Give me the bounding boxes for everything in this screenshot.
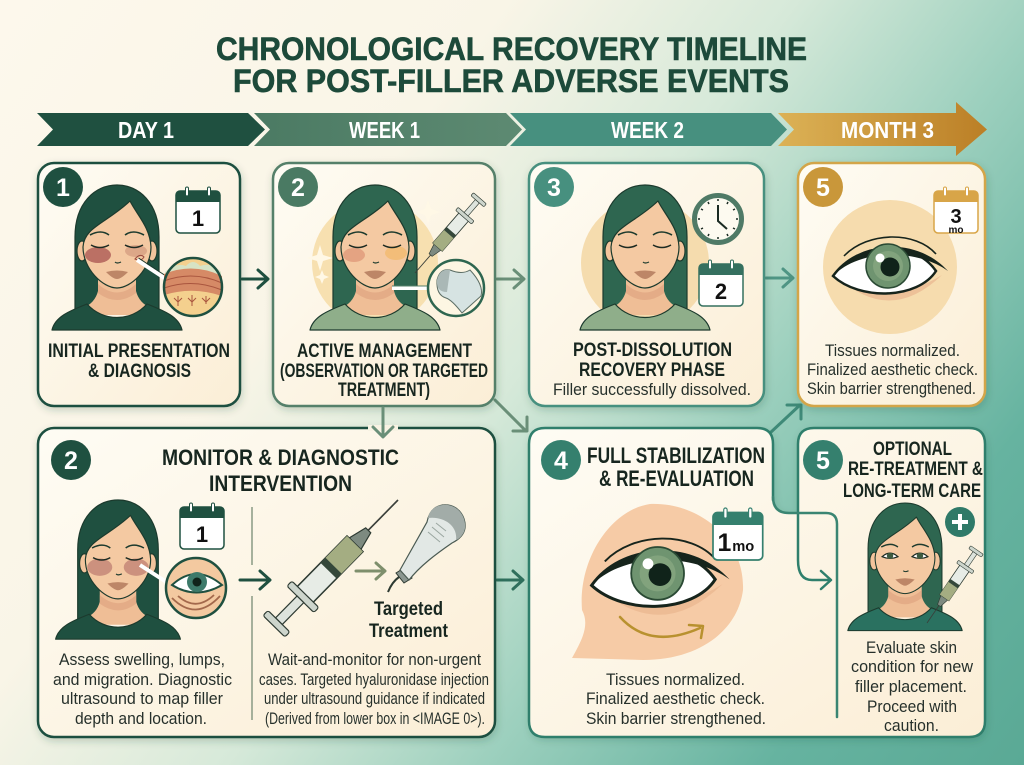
text: treatment: cases. Targeted hyaluronidase injection xyxy=(259,670,489,689)
icon: calendar 1 month: mo xyxy=(732,539,754,555)
text: treatment: under ultrasound guidance if indicated xyxy=(264,689,485,708)
stage: Week 2: WEEK 2 xyxy=(611,117,684,143)
icon: calendar day 1 xyxy=(180,503,224,549)
description: step 5: condition for new xyxy=(851,657,974,676)
arrow: step 2 to step 4 xyxy=(495,400,527,431)
badge 1: 1 xyxy=(56,174,70,202)
stage: Week 1: WEEK 1 xyxy=(349,117,420,143)
description: step 4: Tissues normalized. xyxy=(606,670,745,689)
heading and note: POST-DISSOLUTION xyxy=(573,340,732,361)
badge 4 xyxy=(541,440,581,480)
badge 5 xyxy=(803,167,843,207)
heading: step 5: OPTIONAL xyxy=(873,439,952,460)
heading and note: Filler successfully dissolved. xyxy=(553,380,751,399)
panel: step 3 post-dissolution xyxy=(529,163,764,406)
icon: ultrasound magnifier xyxy=(392,260,484,316)
panel: month 3 result xyxy=(798,163,985,406)
heading: step 4: & RE-EVALUATION xyxy=(599,466,754,491)
heading: & DIAGNOSIS xyxy=(88,361,191,382)
arrow: improvement curve xyxy=(620,617,703,638)
arrow: assess to treat xyxy=(240,571,270,589)
arrow: step 1 to step 2 xyxy=(242,270,268,288)
icon: calendar 1 month xyxy=(713,508,763,560)
panel: step 1 initial presentation xyxy=(38,163,240,406)
heading xyxy=(162,445,399,496)
text: assessment: Assess swelling, lumps, xyxy=(59,650,225,669)
badge 1 xyxy=(43,167,83,207)
divider xyxy=(251,507,253,720)
badge 4: 4 xyxy=(554,447,568,475)
icon: skin layers magnifier xyxy=(137,258,222,316)
illustration: patient with swelling xyxy=(56,500,180,639)
stage: Week 1 xyxy=(254,113,522,146)
illustration: patient with bruising xyxy=(52,185,182,330)
icon: calendar 3 months: mo xyxy=(948,225,964,236)
arrow: step 3 to month 3 xyxy=(766,269,793,287)
description: step 4: Skin barrier strengthened. xyxy=(586,709,766,728)
panel: combined lower right cards xyxy=(529,428,985,737)
icon: clock xyxy=(694,196,742,242)
icon: plus badge xyxy=(945,507,975,537)
text: assessment xyxy=(53,650,232,728)
heading xyxy=(48,341,230,382)
title xyxy=(216,31,807,99)
description: step 5 xyxy=(851,638,974,735)
icon: calendar week 2 xyxy=(699,260,743,306)
heading: MONITOR & DIAGNOSTIC xyxy=(162,445,399,470)
text: assessment: depth and location. xyxy=(75,709,207,728)
badge 5: 5 xyxy=(816,174,830,202)
heading: step 4: FULL STABILIZATION xyxy=(587,443,765,468)
badge 5 xyxy=(803,440,843,480)
text: assessment: ultrasound to map filler xyxy=(61,689,223,708)
arrow: syringe to probe xyxy=(356,563,385,579)
heading xyxy=(280,341,488,401)
label: targeted treatment: Targeted xyxy=(374,599,443,620)
heading: TREATMENT) xyxy=(338,380,430,401)
arrow: step 2 to lower box xyxy=(373,408,393,437)
icon: calendar day 1: 1 xyxy=(196,522,208,547)
icon: calendar 3 months: 3 xyxy=(950,206,962,228)
description: step 4 xyxy=(586,670,766,728)
heading: ACTIVE MANAGEMENT xyxy=(297,341,472,362)
stage: Week 2 xyxy=(510,113,787,146)
description: step 4: Finalized aesthetic check. xyxy=(586,689,765,708)
icon: calendar day 1 xyxy=(176,187,220,233)
icon: syringe xyxy=(919,545,985,628)
description: Finalized aesthetic check. xyxy=(807,360,978,379)
illustration: patient under treatment xyxy=(310,185,440,330)
icon: calendar 1 month: 1 xyxy=(718,529,732,557)
badge 3 xyxy=(534,167,574,207)
heading: step 5 xyxy=(843,439,983,502)
text: treatment: (Derived from lower box in <IMAGE 0>). xyxy=(265,709,485,728)
icon: under-eye magnifier xyxy=(140,558,226,618)
heading: INTERVENTION xyxy=(209,471,352,496)
heading and note: RECOVERY PHASE xyxy=(579,360,725,381)
icon: syringe xyxy=(407,191,488,280)
title: CHRONOLOGICAL RECOVERY TIMELINE xyxy=(216,31,807,67)
description: Tissues normalized. xyxy=(825,341,960,360)
panel: monitor and diagnostic intervention xyxy=(38,408,495,737)
text: treatment xyxy=(259,650,489,728)
outline step 4 and connector xyxy=(529,428,985,737)
heading: step 5: LONG-TERM CARE xyxy=(843,481,981,502)
connector: stabilization to optional care xyxy=(773,497,837,717)
heading and note xyxy=(553,340,751,399)
stage: Day 1 xyxy=(37,113,265,146)
connector arrows behind panels xyxy=(242,269,801,589)
stage: Month 3 xyxy=(778,102,987,156)
glow circle xyxy=(581,199,709,327)
illustration: healed eye xyxy=(592,539,730,615)
timeline banner xyxy=(37,102,987,156)
badge 2: 2 xyxy=(64,447,78,475)
badge 3: 3 xyxy=(547,174,561,202)
icon: calendar week 2: 2 xyxy=(715,279,727,304)
glow circle xyxy=(823,200,957,334)
badge 2 xyxy=(51,440,91,480)
heading: step 5: RE-TREATMENT & xyxy=(848,459,983,480)
description: step 5: Proceed with xyxy=(867,697,957,716)
label: targeted treatment: Treatment xyxy=(369,621,449,642)
illustration: patient long-term care xyxy=(848,503,962,631)
heading: step 4 xyxy=(587,443,765,491)
label: targeted treatment xyxy=(369,599,449,642)
description: Skin barrier strengthened. xyxy=(807,379,976,398)
icon: sparkles xyxy=(307,200,440,284)
badge 5: 5 xyxy=(816,447,830,475)
description xyxy=(807,341,978,398)
description: step 5: caution. xyxy=(884,716,939,735)
icon: large syringe xyxy=(260,487,411,639)
heading: INITIAL PRESENTATION xyxy=(48,341,230,362)
illustration: patient recovering xyxy=(580,185,710,330)
illustration: periorbital skin xyxy=(572,504,743,660)
merged card shape xyxy=(529,428,985,737)
title: FOR POST-FILLER ADVERSE EVENTS xyxy=(233,63,789,99)
stage: Month 3: MONTH 3 xyxy=(841,117,934,143)
badge 2: 2 xyxy=(291,174,305,202)
icon: calendar 3 months xyxy=(934,187,978,236)
illustration: healthy eye xyxy=(833,237,948,301)
glow circle xyxy=(312,200,438,326)
arrow: lower box to step 4 xyxy=(497,571,523,589)
panel: step 2 active management xyxy=(273,163,495,406)
description: step 5: Evaluate skin xyxy=(866,638,957,657)
description: step 5: filler placement. xyxy=(855,677,967,696)
text: assessment: and migration. Diagnostic xyxy=(53,670,232,689)
text: treatment: Wait-and-monitor for non-urgent xyxy=(268,650,481,669)
stage: Day 1: DAY 1 xyxy=(118,117,174,143)
icon: calendar day 1: 1 xyxy=(192,206,204,231)
arrow: step 2 to step 3 xyxy=(497,270,524,288)
badge 2 xyxy=(278,167,318,207)
heading: (OBSERVATION OR TARGETED xyxy=(280,361,488,382)
icon: ultrasound probe xyxy=(388,505,465,592)
arrow: step 4 up to month 3 xyxy=(770,405,801,433)
